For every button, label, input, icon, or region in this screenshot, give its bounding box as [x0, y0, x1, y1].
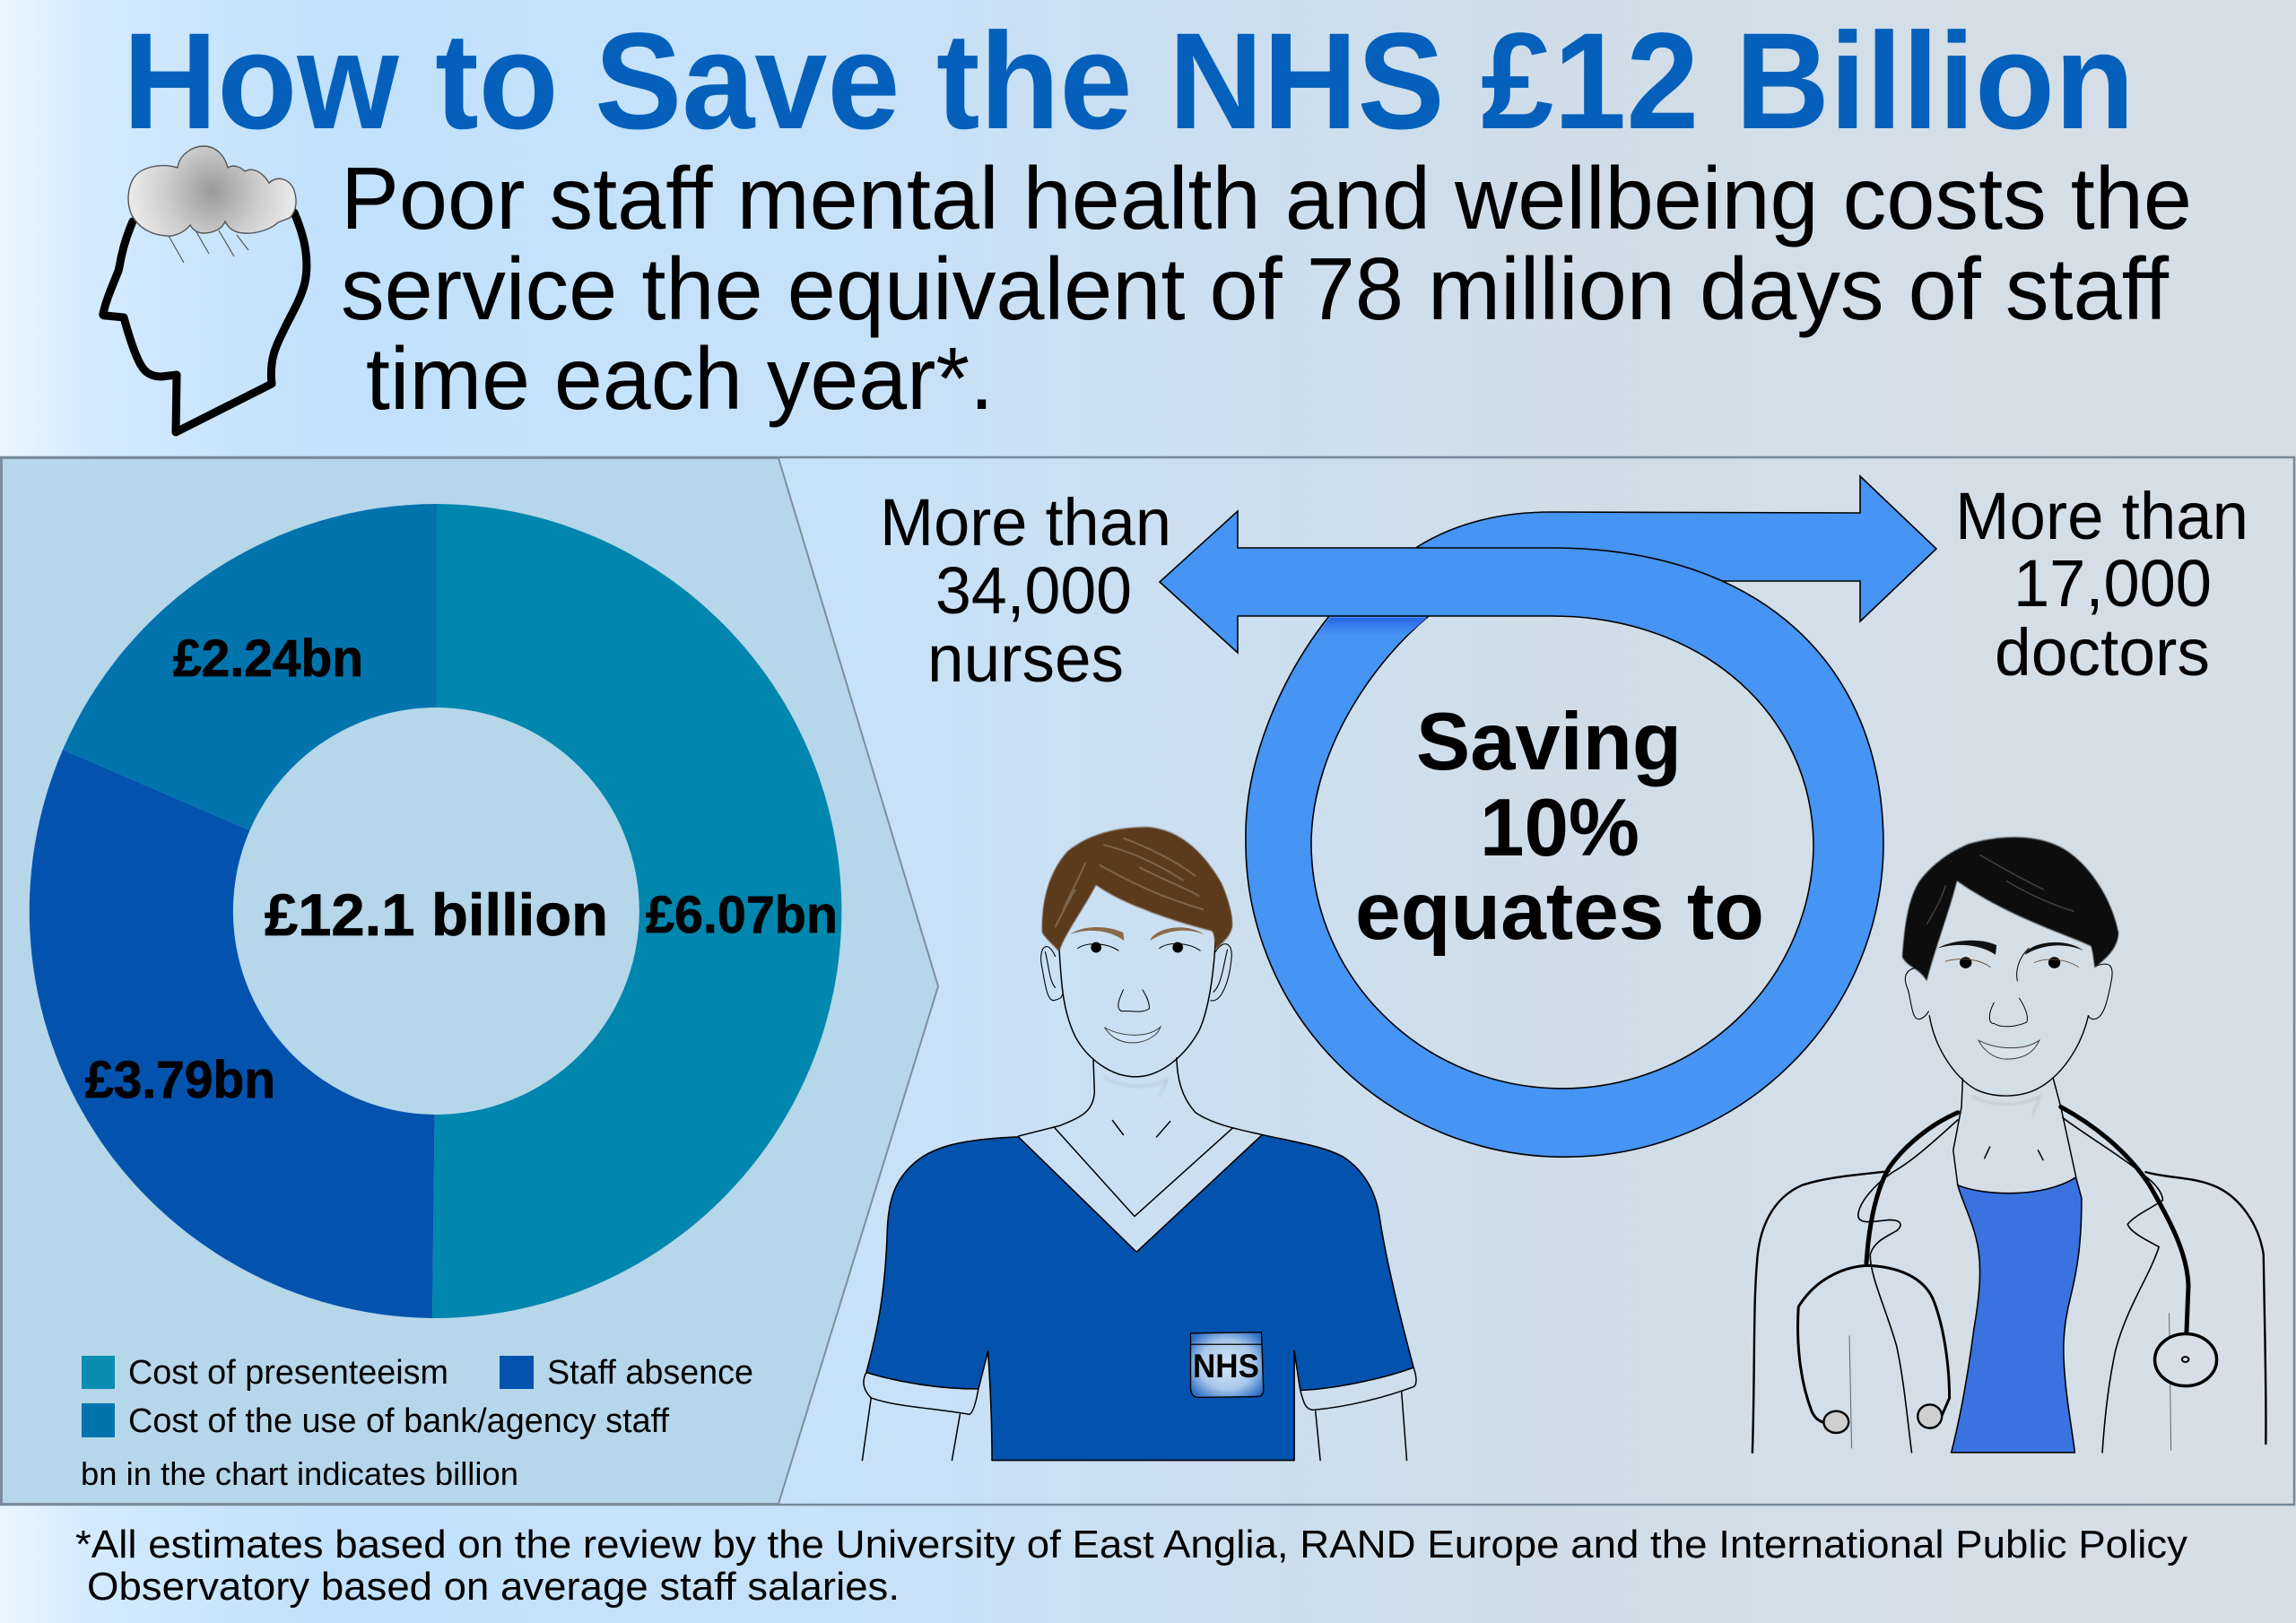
badge line [1190, 1343, 1261, 1345]
nose [1989, 949, 2029, 1027]
footnote: *All estimates based on the review by the University of East Anglia, RAND Europe and the International Public Policy [75, 1523, 2187, 1567]
footnote: Observatory based on average staff salaries. [87, 1565, 900, 1609]
label: agency value: £2.24bn [173, 629, 363, 688]
eyes [1960, 957, 1971, 968]
ears [1905, 964, 2112, 1020]
text: doctors: doctors [1995, 615, 2210, 690]
blue top [1952, 1177, 2082, 1453]
ring text: Saving [1416, 697, 1682, 787]
label: presenteeism value: £6.07bn [646, 886, 838, 944]
chest piece [2155, 1333, 2217, 1386]
eyelids [1945, 959, 2079, 967]
legend: bn in the chart indicates billion [81, 1455, 518, 1492]
arrow: right to doctors [1417, 476, 1936, 621]
chest piece centre [2182, 1357, 2188, 1362]
neck and collar [1019, 1058, 1262, 1217]
chart total: £12.1 billion [265, 881, 608, 948]
title: How to Save the NHS £12 Billion [123, 4, 2135, 158]
ear tips [1823, 1411, 1848, 1433]
eyebrows [1937, 941, 2083, 955]
eyes [1091, 942, 1101, 953]
hair highlights [1056, 838, 1204, 927]
coat pockets [1849, 1314, 2171, 1450]
text: nurses: 34,000 [935, 553, 1132, 628]
nose [1118, 990, 1149, 1011]
ring shading [1318, 618, 1427, 635]
mouth [1979, 1040, 2039, 1059]
intro text: Poor staff mental health and wellbeing costs the [341, 149, 2192, 247]
text: doctors [1955, 479, 2248, 690]
coat lapels [1858, 1118, 2162, 1453]
text: doctors: More than [1955, 479, 2248, 553]
hair highlights [1926, 855, 2074, 924]
badge label: NHS [1193, 1348, 1259, 1384]
legend: Staff absence [547, 1354, 753, 1392]
mouth [1104, 1027, 1161, 1043]
illustration: nurse [862, 827, 1416, 1461]
face [1059, 941, 1215, 1077]
head outline [103, 213, 307, 432]
legend: Cost of presenteeism [128, 1354, 448, 1392]
sleeve cuffs [864, 1367, 1416, 1414]
hair [1042, 827, 1232, 952]
arms [862, 1392, 1407, 1461]
stethoscope tubes [1866, 1107, 2188, 1332]
segment: staff absence [30, 750, 435, 1318]
face [1929, 1016, 2088, 1096]
intro text: service the equivalent of 78 million days of staff [341, 239, 2170, 338]
neck shadow [1103, 1077, 1168, 1097]
segment: cost of presenteeism [432, 504, 841, 1318]
ring text: equates to [1355, 866, 1764, 957]
text: nurses [880, 485, 1171, 696]
ring with arrow to nurses [1160, 511, 1883, 1157]
eyebrows [1071, 927, 1205, 941]
rain [169, 230, 248, 263]
panel: cost breakdown [2, 458, 938, 1504]
label: absence value: £3.79bn [85, 1051, 275, 1109]
neck shadow [1972, 1096, 2040, 1115]
eyelids [1078, 943, 1200, 950]
ring text: 10% [1480, 783, 1639, 873]
ears [1041, 944, 1231, 1001]
nhs badge [1190, 1332, 1264, 1397]
segment: bank and agency staff [63, 504, 437, 830]
stethoscope loop [1798, 1265, 1950, 1423]
cloud [128, 146, 296, 236]
footnote [75, 1523, 2187, 1609]
hair [1902, 838, 2118, 981]
nurse scrubs [866, 1134, 1413, 1461]
intro text [341, 149, 2192, 428]
legend: Cost of the use of bank/agency staff [128, 1402, 669, 1440]
ring text [1355, 697, 1764, 957]
donut chart [30, 504, 841, 1318]
coat shoulders [1752, 1171, 2266, 1453]
illustration: doctor [1752, 838, 2266, 1453]
neck [1953, 1079, 2076, 1185]
legend [81, 1354, 753, 1492]
text: doctors: 17,000 [2013, 546, 2212, 621]
icon: head with rain cloud [103, 146, 307, 432]
main panel frame [1, 457, 2294, 1505]
text: nurses: More than [880, 485, 1171, 560]
intro text: time each year*. [366, 329, 994, 428]
text: nurses: nurses [927, 621, 1124, 696]
